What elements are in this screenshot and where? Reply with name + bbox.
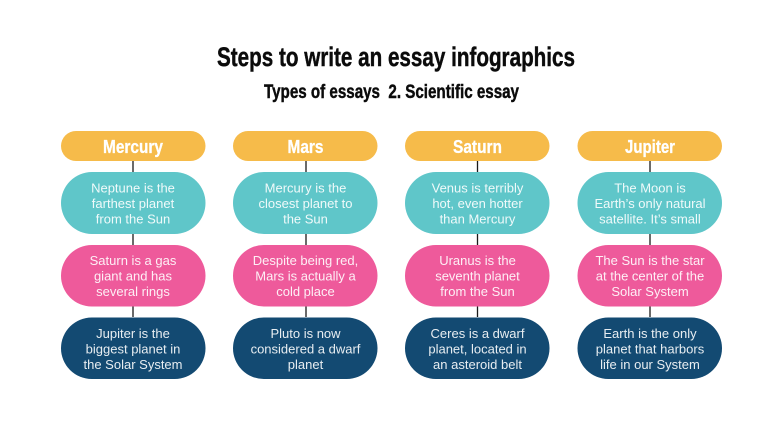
- pink step: from the Sun: [440, 284, 515, 299]
- teal step: The Moon is: [614, 180, 686, 196]
- pink step: giant and has: [94, 268, 173, 284]
- navy step: the Solar System: [84, 357, 182, 372]
- navy step: biggest planet in: [86, 342, 180, 356]
- pink step: at the center of the: [596, 268, 704, 284]
- header: Mercury: [61, 131, 206, 161]
- teal step: from the Sun: [96, 212, 170, 226]
- teal step: [61, 172, 206, 234]
- pink step: Mars is actually a: [255, 268, 356, 284]
- header: Mercury: Mercury: [103, 137, 163, 157]
- navy step: [233, 318, 378, 379]
- column: Mars: [233, 131, 378, 379]
- pink step: Saturn is a gas: [90, 253, 177, 268]
- header: Saturn: Saturn: [453, 137, 502, 157]
- navy step: [405, 318, 550, 379]
- pink step: [578, 245, 722, 306]
- navy step: Pluto is now: [270, 326, 341, 341]
- navy step: planet that harbors: [596, 342, 705, 356]
- pink step: several rings: [96, 284, 170, 299]
- navy step: Earth is the only: [603, 326, 697, 341]
- header: Mars: Mars: [288, 137, 324, 157]
- teal step: the Sun: [283, 212, 328, 226]
- header: Saturn: [405, 131, 550, 161]
- teal step: satellite. It’s small: [599, 212, 701, 226]
- header: Jupiter: [578, 131, 722, 161]
- pink step: Solar System: [611, 284, 689, 299]
- subtitle: Types of essays 2. Scientific essay: [264, 82, 519, 103]
- teal step: closest planet to: [259, 196, 352, 211]
- pink step: [405, 245, 550, 306]
- pink step: [233, 245, 378, 306]
- navy step: an asteroid belt: [433, 357, 522, 372]
- title: Steps to write an essay infographics: [217, 42, 575, 72]
- header: Mars: [233, 131, 378, 161]
- pink step: [61, 245, 206, 306]
- teal step: hot, even hotter: [432, 196, 523, 211]
- teal step: farthest planet: [92, 196, 175, 211]
- navy step: considered a dwarf: [251, 342, 361, 356]
- navy step: life in our System: [600, 357, 700, 372]
- pink step: Despite being red,: [253, 253, 358, 268]
- navy step: Jupiter is the: [96, 326, 170, 341]
- pink step: Uranus is the: [439, 253, 516, 268]
- teal step: Mercury is the: [265, 180, 346, 196]
- navy step: [578, 318, 722, 379]
- navy step: planet: [288, 357, 324, 372]
- header: Jupiter: Jupiter: [625, 137, 675, 157]
- column: Jupiter: [578, 131, 722, 379]
- teal step: than Mercury: [440, 212, 516, 226]
- teal step: [578, 172, 722, 234]
- teal step: Venus is terribly: [432, 180, 524, 196]
- column: Mercury: [61, 131, 206, 379]
- pink step: seventh planet: [435, 268, 520, 284]
- teal step: Earth’s only natural: [594, 196, 706, 211]
- column: Saturn: [405, 131, 550, 379]
- navy step: Ceres is a dwarf: [431, 326, 525, 341]
- teal step: Neptune is the: [91, 180, 175, 196]
- pink step: The Sun is the star: [595, 253, 705, 268]
- teal step: [405, 172, 550, 234]
- navy step: planet, located in: [428, 342, 527, 356]
- pink step: cold place: [276, 284, 335, 299]
- navy step: [61, 318, 206, 379]
- teal step: [233, 172, 378, 234]
